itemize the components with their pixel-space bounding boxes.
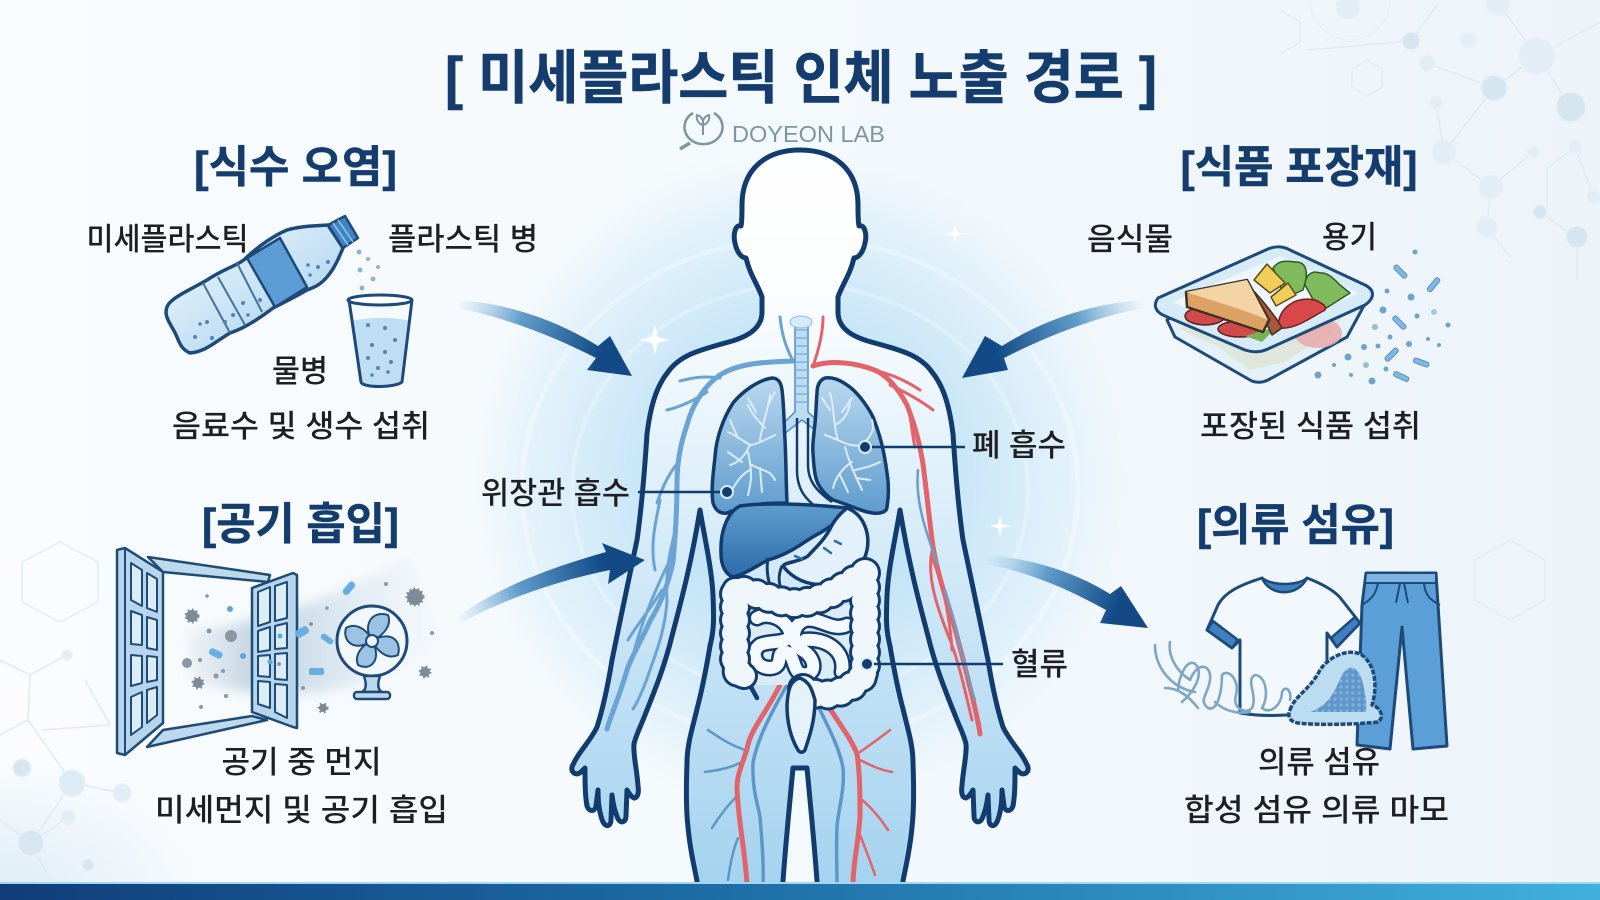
panel: clothing fibers	[1155, 501, 1449, 828]
panel: food packaging	[1087, 143, 1450, 444]
icon: dust and virus particles	[182, 580, 434, 712]
caption line 2: 미세먼지 및 공기 흡입	[155, 793, 448, 828]
heading: [의류 섬유]	[1197, 501, 1394, 550]
label: container: 용기	[1322, 220, 1377, 255]
label: food: 음식물	[1087, 222, 1173, 257]
logo: Doyeon Lab	[680, 113, 885, 149]
human body	[481, 150, 1068, 890]
caption line 1: 공기 중 먼지	[222, 745, 382, 780]
caption: 음료수 및 생수 섭취	[172, 409, 430, 444]
caption line 2: 합성 섬유 의류 마모	[1184, 793, 1449, 828]
icon: open window	[117, 548, 297, 755]
arteries: red arm and leg vessels	[737, 317, 980, 884]
body silhouette	[572, 150, 1028, 890]
stomach	[767, 508, 868, 594]
icon: lint pile	[1289, 652, 1381, 724]
trachea	[774, 316, 830, 438]
heading: [식수 오염]	[194, 143, 397, 192]
arrow: air to body	[456, 543, 645, 626]
label: plastic bottle: 플라스틱 병	[388, 222, 538, 257]
label: GI absorption: 위장관 흡수	[481, 476, 630, 511]
lungs	[712, 378, 888, 513]
label: lung absorption	[859, 428, 1066, 463]
icon: fiber squiggles	[1155, 642, 1290, 713]
panel: air inhalation	[117, 500, 448, 828]
label: water bottle: 물병	[272, 354, 328, 389]
icon: microplastic particles	[1314, 250, 1450, 384]
label: GI absorption	[481, 476, 733, 511]
heading: [식품 포장재]	[1180, 143, 1418, 192]
label: bloodstream: 혈류	[1011, 647, 1068, 682]
icon: fan	[337, 606, 407, 699]
intestines	[735, 573, 865, 752]
arrow: body to clothing	[985, 555, 1148, 628]
arrow: drinking water to body	[456, 300, 632, 376]
bottom bar	[0, 882, 1600, 900]
icon: water bottle	[166, 216, 380, 353]
icon: t-shirt	[1207, 578, 1360, 716]
label: bloodstream	[861, 647, 1068, 682]
logo: Doyeon Lab: DOYEON LAB	[732, 121, 885, 147]
heading: [공기 흡입]	[202, 500, 399, 549]
liver	[721, 504, 847, 577]
panel: drinking water	[86, 143, 538, 444]
veins: blue arm and leg vessels	[607, 317, 843, 884]
icon: food container	[1155, 247, 1372, 382]
caption line 1: 의류 섬유	[1258, 745, 1380, 780]
esophagus	[797, 418, 832, 510]
label: lung absorption: 폐 흡수	[972, 428, 1066, 463]
body outline	[572, 150, 1028, 890]
icon: pants	[1357, 573, 1447, 749]
caption: 포장된 식품 섭취	[1200, 409, 1421, 444]
title: [ 미세플라스틱 인체 노출 경로 ]	[445, 46, 1157, 111]
icon: water glass	[348, 295, 412, 386]
label: microplastics: 미세플라스틱	[86, 222, 248, 257]
icon: air stream	[185, 555, 445, 694]
arrow: food packaging to body	[962, 300, 1144, 378]
